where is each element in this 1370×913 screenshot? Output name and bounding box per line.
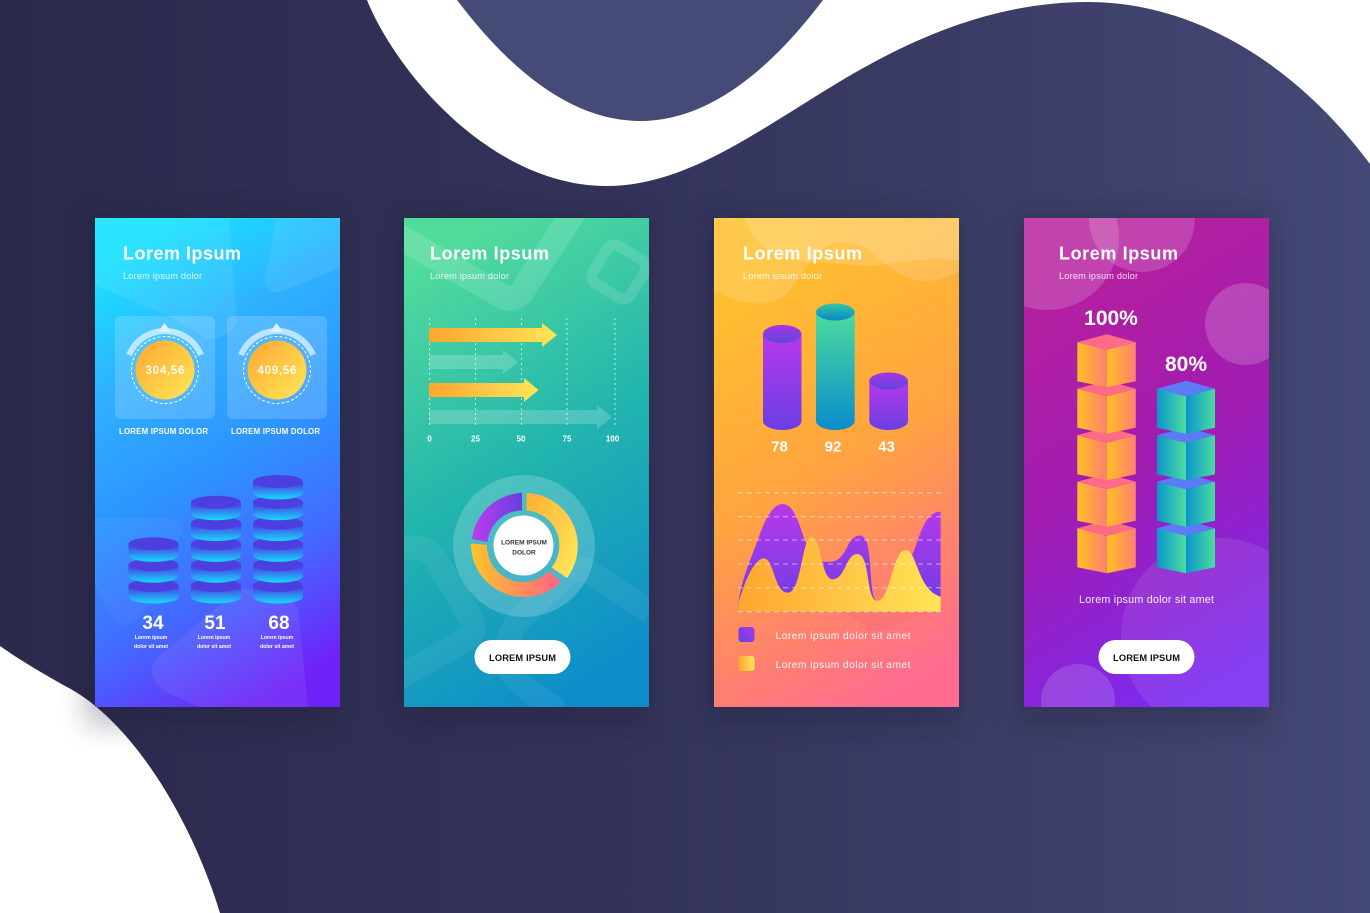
donut chart <box>453 475 595 617</box>
arrow chart: 25 <box>471 434 480 444</box>
stack label 34: Lorem ipsum <box>135 635 168 641</box>
arrow chart: 100 <box>606 434 620 444</box>
button <box>1098 640 1194 674</box>
gauge widget 2 <box>227 316 327 419</box>
coin stack: 51 <box>191 496 241 604</box>
panel: card 3 orange <box>714 218 959 707</box>
legend: purple <box>738 627 911 642</box>
panel: card 4 purple <box>1024 218 1269 707</box>
stack label 51: 51 <box>204 613 226 634</box>
legend: purple: Lorem ipsum dolor sit amet <box>776 631 911 642</box>
heading: Lorem Ipsum <box>1059 244 1178 264</box>
card shadows <box>85 214 1271 726</box>
heading: Lorem Ipsum <box>123 244 241 264</box>
gauge caption 2: LOREM IPSUM DOLOR <box>231 427 320 436</box>
subheading: Lorem ipsum dolor <box>123 271 202 281</box>
cylinder 43 <box>869 372 908 456</box>
gauge widget 1 <box>115 316 215 419</box>
cube stack 80% <box>1157 381 1215 573</box>
cube stack 100% <box>1077 334 1136 573</box>
button: LOREM IPSUM <box>489 653 556 663</box>
gauge caption 1: LOREM IPSUM DOLOR <box>119 427 208 436</box>
legend: yellow: Lorem ipsum dolor sit amet <box>776 660 911 671</box>
donut chart: DOLOR <box>512 550 536 556</box>
panel: card 2 teal <box>395 212 650 712</box>
cylinder 92 <box>816 304 855 456</box>
stack label 51: Lorem ipsum <box>198 635 231 641</box>
cylinder 78: 78 <box>771 438 788 456</box>
stack label 68: dolor sit amet <box>260 644 294 650</box>
stack label 68 <box>260 613 294 650</box>
button <box>474 640 570 674</box>
stack label 51 <box>197 613 231 650</box>
legend: yellow <box>738 656 911 671</box>
caption: Lorem ipsum dolor sit amet <box>1079 594 1214 606</box>
heading: Lorem Ipsum <box>430 244 549 264</box>
label 100%: 100% <box>1084 307 1138 330</box>
stack label 68: Lorem ipsum <box>261 635 294 641</box>
gauge widget 2: 409,56 <box>258 365 296 377</box>
stack label 68: 68 <box>268 613 290 634</box>
coin stack: 68 <box>253 475 303 604</box>
button: LOREM IPSUM <box>1113 653 1180 663</box>
cylinder 92: 92 <box>825 438 841 456</box>
cylinder 43: 43 <box>878 438 895 456</box>
arrow chart: 75 <box>563 434 572 444</box>
arrow chart: 0 <box>427 434 432 444</box>
arrow chart <box>427 318 620 444</box>
panel: card 1 blue <box>95 218 340 707</box>
coin stack: 34 <box>128 537 178 604</box>
subheading: Lorem ipsum dolor <box>430 271 509 281</box>
cylinder 78 <box>763 325 802 456</box>
background: top semicircle <box>457 0 823 121</box>
stack label 34: dolor sit amet <box>134 644 168 650</box>
subheading: Lorem ipsum dolor <box>1059 271 1138 281</box>
subheading: Lorem ipsum dolor <box>743 271 822 281</box>
label 80%: 80% <box>1165 353 1207 376</box>
area chart <box>738 493 941 612</box>
stack label 34: 34 <box>142 613 164 634</box>
gauge widget 1: 304,56 <box>146 365 184 377</box>
arrow chart: 50 <box>517 434 526 444</box>
stack label 51: dolor sit amet <box>197 644 231 650</box>
donut chart: LOREM IPSUM <box>501 540 547 546</box>
heading: Lorem Ipsum <box>743 244 862 264</box>
stack label 34 <box>134 613 168 650</box>
